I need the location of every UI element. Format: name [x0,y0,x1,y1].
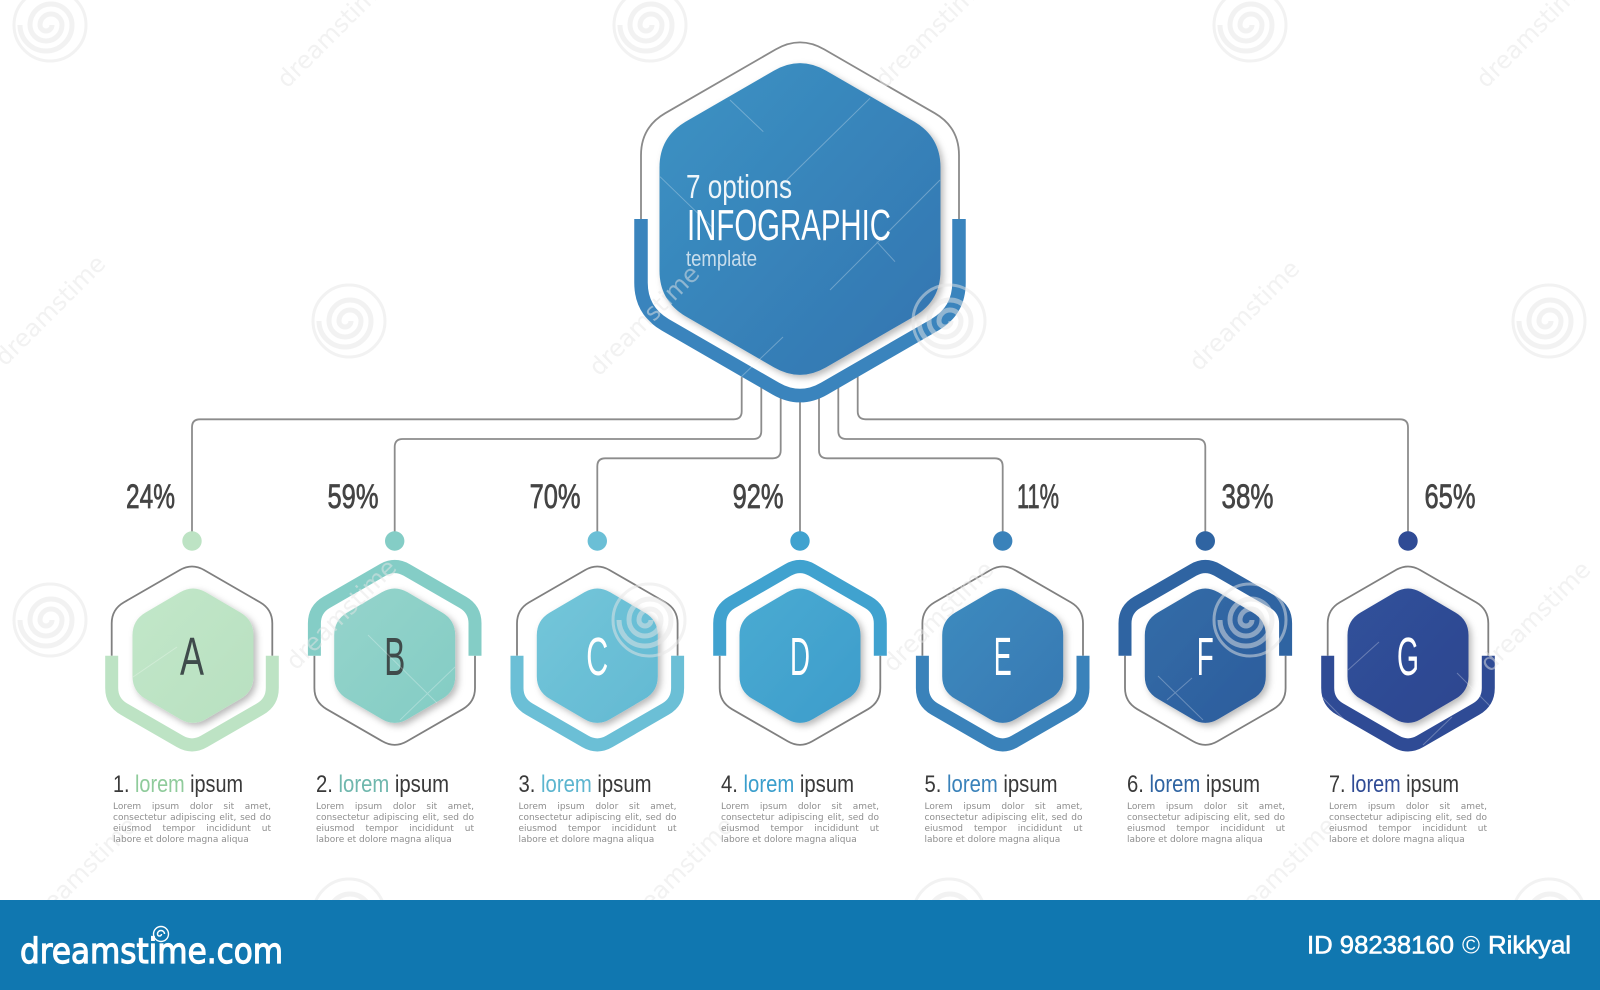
option E [922,566,1083,745]
D letter: D [790,627,810,687]
A outline [112,566,272,656]
description 5 [924,802,1082,845]
percentage labels: 70% [530,478,581,516]
central hexagon fill [660,63,940,375]
description 5: consectetur adipiscing elit, sed do [924,813,1082,823]
description 7: Lorem ipsum dolor sit amet, [1329,802,1487,812]
description 2 [316,802,474,845]
C fill [537,588,658,723]
watermark: dreamstime [20,811,142,933]
B outline [314,656,475,745]
footer logo spiral [154,926,168,942]
description 4: eiusmod tempor incididunt ut [721,824,879,834]
E accent [922,656,1083,745]
description 3: labore et dolore magna aliqua [518,835,654,845]
title line: 7 options: 7 options [686,168,792,205]
C letter: C [586,627,608,687]
description 3: consectetur adipiscing elit, sed do [518,813,676,823]
option D [720,566,880,745]
option B [314,566,475,745]
percentage labels: 92% [733,478,784,516]
description 7: labore et dolore magna aliqua [1329,835,1465,845]
option headings: 6. lorem ipsum [1127,771,1260,798]
description 1: eiusmod tempor incididunt ut [113,824,271,834]
F fill [1145,588,1266,723]
option A [112,566,272,745]
description 4 [721,802,879,845]
description 3 [518,802,676,845]
B fill [334,588,455,723]
E fill [942,588,1063,723]
E outline [922,566,1083,656]
title [686,168,891,271]
description 1: Lorem ipsum dolor sit amet, [113,802,271,812]
description 1: labore et dolore magna aliqua [113,835,249,845]
F accent [1125,566,1286,656]
description 6: eiusmod tempor incididunt ut [1127,824,1285,834]
description 2: labore et dolore magna aliqua [316,835,452,845]
connector lines [192,369,1408,541]
option E: E [994,627,1012,687]
G letter: G [1397,627,1419,687]
watermark: dreamstime [280,553,402,675]
option headings [113,771,1459,798]
watermark: dreamstime [1183,254,1305,376]
description 2: eiusmod tempor incididunt ut [316,824,474,834]
watermark: dreamstime [1474,555,1596,677]
B accent [314,566,475,656]
footer image id and credit: ID 98238160 [1307,931,1454,959]
footer bar [0,900,1600,990]
footer image id and credit: © [1462,931,1481,959]
title line: INFOGRAPHIC: INFOGRAPHIC [687,202,891,250]
F outline [1125,656,1286,745]
central hexagon thick accent [641,219,959,396]
title line: template: template [686,246,757,271]
option headings: 4. lorem ipsum [721,771,854,798]
A letter: A [180,627,204,687]
watermark: dreamstime [877,555,999,677]
watermark: dreamstime [617,811,739,933]
description 6 [1127,802,1285,845]
option headings: 2. lorem ipsum [316,771,449,798]
C accent [517,656,678,745]
description 4: consectetur adipiscing elit, sed do [721,813,879,823]
percentage labels: 11% [1017,478,1059,516]
G outline [1328,566,1488,656]
percentage labels: 24% [126,478,175,516]
C outline [517,566,678,656]
central hexagon outline [641,42,959,219]
description 2: Lorem ipsum dolor sit amet, [316,802,474,812]
description 7: consectetur adipiscing elit, sed do [1329,813,1487,823]
option headings: 1. lorem ipsum [113,771,243,798]
option headings: 5. lorem ipsum [924,771,1058,798]
A accent [112,656,272,745]
option F [1125,566,1286,745]
description 4: Lorem ipsum dolor sit amet, [721,802,879,812]
percentage labels: 59% [328,478,378,516]
footer image id and credit: Rikkyal [1488,931,1571,959]
description 5: Lorem ipsum dolor sit amet, [924,802,1082,812]
percentage labels: 65% [1424,478,1476,516]
G accent [1328,656,1488,745]
description 7: eiusmod tempor incididunt ut [1329,824,1487,834]
D fill [740,588,860,723]
option G [1328,566,1488,745]
description 3: eiusmod tempor incididunt ut [518,824,676,834]
description 5: eiusmod tempor incididunt ut [924,824,1082,834]
G fill [1348,588,1468,723]
description 5: labore et dolore magna aliqua [924,835,1060,845]
option headings: 7. lorem ipsum [1329,771,1459,798]
description 4: labore et dolore magna aliqua [721,835,857,845]
watermark: dreamstime [1219,811,1341,933]
footer image id and credit [1307,931,1571,959]
description 6: labore et dolore magna aliqua [1127,835,1263,845]
percentage labels [126,478,1476,516]
description 6: Lorem ipsum dolor sit amet, [1127,802,1285,812]
A fill [132,588,254,723]
percentage labels: 38% [1222,478,1274,516]
watermark: dreamstime [583,259,705,381]
option headings: 3. lorem ipsum [518,771,652,798]
connector end dots [182,531,1418,551]
footer logo text: dreamstime.com [20,932,283,972]
description 1: consectetur adipiscing elit, sed do [113,813,271,823]
B letter: B [384,627,405,687]
F letter: F [1197,627,1214,687]
D outline [720,656,880,745]
description 3: Lorem ipsum dolor sit amet, [518,802,676,812]
option C [517,566,678,745]
description 2: consectetur adipiscing elit, sed do [316,813,474,823]
description 1 [113,802,271,845]
central hexagon [641,42,959,396]
description 7 [1329,802,1487,845]
D accent [720,566,880,656]
description 6: consectetur adipiscing elit, sed do [1127,813,1285,823]
